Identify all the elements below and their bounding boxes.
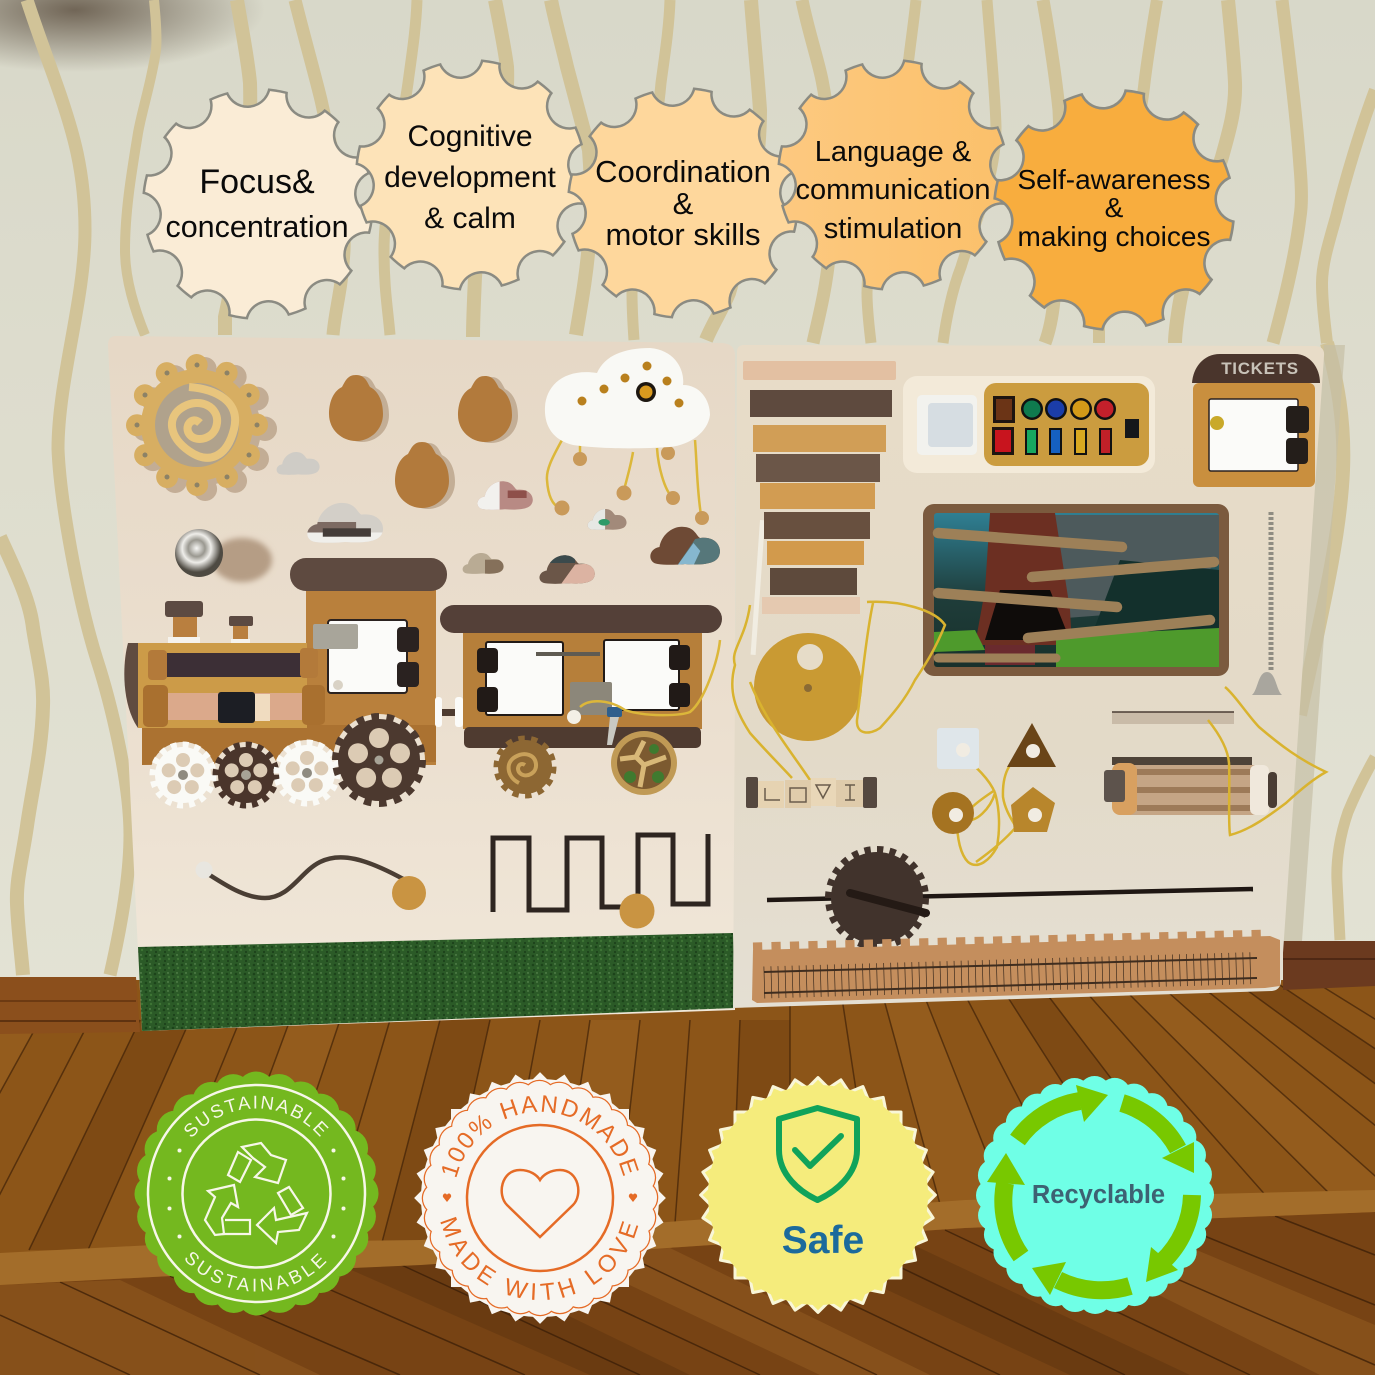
- slot: wavy track with knob: [196, 857, 426, 910]
- slider and wooden cylinder: [1104, 712, 1277, 815]
- lacing shapes: [932, 723, 1056, 834]
- gear: language and communication: stimulation: [824, 213, 962, 245]
- gear: focus and concentration: Focus&: [199, 163, 315, 201]
- panel: right busy board: [732, 345, 1326, 1008]
- marble run screen: [923, 504, 1229, 676]
- gear: self-awareness and choices: making choices: [1018, 221, 1210, 252]
- toothed wooden rack with rail: [752, 934, 1280, 1003]
- icon: silver bell: [175, 529, 272, 582]
- wall background: [0, 0, 1375, 1000]
- gear: focus and concentration: [142, 88, 374, 320]
- gear: language and communication: [777, 59, 1009, 291]
- gear: self-awareness and choices: Self-awareness: [1018, 164, 1210, 195]
- slot: meander track with knob: [493, 834, 708, 928]
- tickets booth door: [1192, 354, 1320, 487]
- badge: sustainable: [134, 1072, 378, 1316]
- badge: 100% handmade: MADE WITH LOVE: [440, 1216, 638, 1300]
- baseboards: [0, 941, 1375, 1034]
- badge: 100% handmade: 100% HANDMADE: [442, 1095, 639, 1178]
- control panel with switches and lights: [903, 376, 1155, 473]
- illustration: train wagon: [440, 605, 722, 795]
- long slot with dark gear: [767, 852, 1253, 944]
- gear: language and communication: Language &: [815, 136, 971, 168]
- gear: cognitive development: [355, 59, 587, 291]
- gear: cognitive development: Cognitive: [407, 120, 533, 153]
- yellow string over cylinder: [1208, 687, 1326, 835]
- icon: heart outline: [502, 1170, 578, 1237]
- icon: mirror clouds: [277, 452, 726, 587]
- illustration: wooden train engine: [124, 558, 463, 765]
- icon: recycling arrows: [205, 1143, 307, 1243]
- gear: focus and concentration: concentration: [165, 210, 349, 244]
- gear: coordination and motor skills: [567, 87, 799, 319]
- yellow strings: [732, 602, 1028, 865]
- gear: coordination and motor skills: &: [673, 186, 694, 221]
- yellow strings and beads: [547, 440, 709, 525]
- badge: sustainable: SUSTAINABLE: [185, 1252, 326, 1292]
- badge: sustainable: SUSTAINABLE: [184, 1096, 329, 1137]
- bead chain with bell: [1252, 512, 1282, 695]
- icon: sun maze: [134, 362, 265, 489]
- floor: [0, 980, 1375, 1375]
- gear: language and communication: communication: [795, 174, 991, 206]
- gear: self-awareness and choices: &: [1105, 192, 1124, 223]
- badge: recyclable: Recyclable: [1032, 1181, 1165, 1209]
- tickets booth door: TICKETS: [1221, 359, 1299, 378]
- round wooden disc: [754, 633, 862, 741]
- icon: white cloud: [545, 348, 710, 448]
- badge: safe: [701, 1078, 935, 1312]
- gear: self-awareness and choices: [993, 89, 1235, 331]
- artificial grass strip: [138, 933, 735, 1031]
- gear: coordination and motor skills: Coordination: [595, 154, 771, 189]
- icon: train gears: [150, 714, 425, 808]
- wooden picture blocks: [746, 777, 877, 808]
- badge: safe: Safe: [782, 1219, 864, 1262]
- badge: recyclable: [985, 1085, 1205, 1305]
- gear: cognitive development: development: [384, 161, 557, 194]
- gear: cognitive development: & calm: [424, 202, 516, 235]
- panel: left busy board: [108, 336, 735, 1031]
- icon: wooden pear shapes: [329, 375, 518, 509]
- badge: 100% handmade: [414, 1072, 666, 1324]
- gear: coordination and motor skills: motor skills: [605, 217, 761, 252]
- icon: wooden stair planks: [743, 361, 896, 655]
- icon: shield with check: [779, 1108, 857, 1200]
- icon: circular green arrows: [987, 1085, 1194, 1295]
- shadow of right board on the wall: [1283, 345, 1345, 941]
